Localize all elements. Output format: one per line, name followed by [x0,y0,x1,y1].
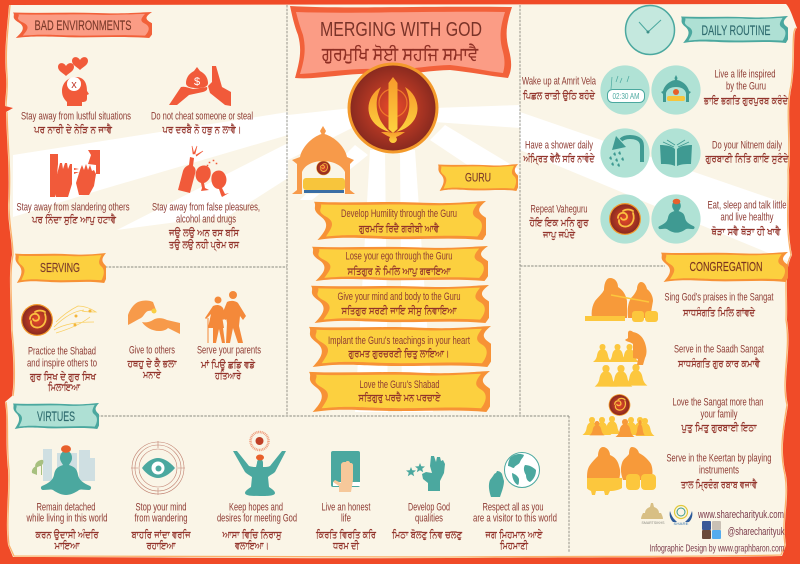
text: detached: while living in this world [26,512,108,524]
text: praises [664,292,774,319]
text: shabad: ਗੁਰ ਸਿਖ ਦੇ ਗੁਰ ਸਿਖ [29,371,97,383]
banner: mind and body [311,285,492,323]
text: detached [26,502,108,552]
banner: humility [314,201,489,240]
icon: smart sikhs logo [641,503,665,525]
decorative rays [13,105,790,412]
heading: guru [438,164,520,191]
text: give [127,344,177,381]
text: wandering [131,502,191,552]
heading: congregation [661,252,790,282]
text: hopes [217,502,297,552]
text: do not cheat: ਪਰ ਦਰਬੈ ਨੋ ਹਥੁ ਨ ਲਾਵੈ। [162,123,242,136]
title text: MERGING WITH GOD [320,19,482,41]
text: amrit vela: Wake up at Amrit Vela [522,76,597,88]
text: lustful situations: ਪਰ ਨਾਰੀ ਦੇ ਨੇੜਿ ਨ ਜਾਵੈ [33,124,113,136]
text: amrit vela: ਪਿਛਲ ਰਾਤੀ ਉਠਿ ਬਹੰਦੇ [522,90,595,102]
text: honest: ਕਿਰਤਿ ਵਿਰਤਿ ਕਰਿ [315,529,377,541]
icon: hand and globe [489,452,540,497]
text: shower [523,140,595,165]
text: respect [473,502,557,552]
text: lustful situations [21,110,131,136]
text: false pleasures [152,202,260,251]
banner: humility: Develop Humility through the Guru [341,208,457,220]
heading: virtues: VIRTUES [37,409,75,424]
text: slandering: ਪਰ ਨਿੰਦਾ ਸੁਣਿ ਆਪੁ ਹਟਾਵੈ [31,214,117,226]
icon: giving hands [128,300,180,334]
text: give: ਹਥਹੁ ਦੇ ਕੈ ਭਲਾ [127,358,177,370]
text: god qualities: Develop God [408,502,450,514]
text: life inspired [703,68,788,107]
banner: shabad [309,371,494,412]
icon: social media squares [702,521,721,539]
heading: bad environments: BAD ENVIRONMENTS [34,18,132,33]
text: hopes: desires for meeting God [217,512,297,524]
text: saadh sangat [674,344,764,370]
banner: ego [312,246,491,281]
icon: eye target [131,441,185,495]
text: honest: life [341,512,351,524]
text: honest [315,502,377,552]
text: lustful situations: Stay away from lustful situations [21,110,131,122]
text: respect: ਮਿਹਮਾਣੀ [499,540,529,552]
icon: hands blocking ears [50,150,100,197]
text: god qualities: ਮਿਠਾ ਬੋਲਣੁ ਨਿਵ ਚਲਣੁ [391,528,462,541]
title banner: ਗੁਰਮੁਖਿ ਸੋਈ ਸਹਜਿ ਸਮਾਵੈ [321,44,479,64]
text: respect: ਜਗ ਮਿਹਮਾਨ ਆਏ [485,529,543,541]
icon: share logo [670,506,692,526]
icon: smart sikhs logo: SMARTSIKHS [642,521,665,525]
text: amrit vela [522,76,597,102]
text: shabad: Practice the Shabad [28,346,96,358]
icon: hand on book [331,451,360,492]
icon: elderly parents [205,291,246,343]
text: give: ਮਨਾਏ [142,369,161,381]
heading: serving: SERVING [40,261,80,275]
heading: virtues [13,403,101,429]
text: do not cheat: Do not cheat someone or steal [151,110,253,122]
text: vaheguru [529,204,589,241]
text: praises: ਸਾਧਸੰਗਤਿ ਮਿਲਿ ਗਾਂਵਦੇ [682,307,755,319]
text: hopes: Keep hopes and [229,502,283,514]
dashed section dividers [97,5,665,552]
text: wandering: ਬਾਹਰਿ ਜਾਂਦਾ ਵਰਜਿ [131,529,191,541]
text: god qualities: qualities [415,512,443,524]
text: parents: ਹਤਿਆਰੇ [214,370,242,382]
icon: meditating in city [32,445,95,495]
icon: figure with raised arms and sun [233,432,286,496]
text: keertan: ਤਾਲ ਮ੍ਰਿਦੰਗ ਰਬਾਬ ਵਜਾਵੈ [680,479,758,491]
text: honest: ਧਰਮ ਦੀ [332,540,360,552]
text: shower: ਅੰਮ੍ਰਿਤ ਵੇਲੈ ਸਰਿ ਨਾਵੰਦੇ [523,153,595,165]
text: eat sleep [708,200,786,238]
text: do not cheat [151,110,253,136]
text: vaheguru: Repeat Vaheguru [530,204,588,216]
title banner [290,6,512,78]
panel: daily routine [522,65,789,244]
heading: serving [15,253,108,283]
text: respect: Respect all as you [482,502,544,514]
text: saadh sangat: ਸਾਧਸੰਗਤਿ ਗੁਰ ਕਾਰ ਕਮਾਵੈ [677,358,761,370]
text: keertan: instruments [699,464,739,476]
icon: musicians singing [585,278,658,322]
panel: bad environments [16,57,260,251]
text: god qualities [391,502,462,541]
text: detached: ਮਾਇਆ [54,540,80,552]
text: shabad: ਮਿਲਾਇਆ [47,382,81,394]
icon: sangat with emblem [582,394,654,437]
text: vaheguru: ਹੋਇ ਇਕ ਮਨਿ ਗੁਰ [529,216,589,229]
icon: keertan musicians [587,447,656,495]
banner: shabad: Love the Guru's Shabad [360,379,440,391]
icon: serving the sangat [593,331,647,387]
text: nitnem [705,140,789,165]
text: slandering: Stay away from slandering others [16,202,130,214]
banner: mind and body: Give your mind and body to the Guru [338,291,460,303]
text: life inspired: Live a life inspired [714,68,776,80]
text: shower: Have a shower daily [525,140,593,152]
text: false pleasures: ਤਉ ਲਉ ਨਹੀ ਪ੍ਰੇਮ ਰਸ [168,239,239,251]
panel: serving [21,291,261,394]
text: eat sleep: ਥੋੜਾ ਸਵੈ ਥੋੜਾ ਹੀ ਖਾਵੈ [711,225,781,238]
icon: gurdwara [292,126,355,194]
text: vaheguru: ਜਾਪੁ ਜਪੰਦੇ [542,229,575,241]
heading: guru: GURU [465,170,491,184]
banner: ego: Lose your ego through the Guru [346,250,452,262]
text: life inspired: by the Guru [726,80,766,92]
text: detached: Remain detached [36,502,96,514]
text: wandering: Stop your mind [136,502,186,514]
text: love sangat: ਪੁਤੁ ਮਿਤੁ ਗੁਰਬਾਈ ਇਠਾ [681,422,757,434]
icon: hands and money bag [169,66,231,106]
panel: guru banners [309,201,495,412]
panel: congregation [582,278,774,495]
banner: mind and body: ਸਤਿਗੁਰ ਸਰਣੀ ਜਾਇ ਸੀਸੁ ਨਿਵਾਇਆ [341,305,457,317]
text: love sangat: your family [700,408,738,420]
text: keertan [666,452,772,491]
heading: daily routine [681,16,790,43]
icon: champagne and glasses [178,146,229,197]
text: slandering [16,202,130,226]
icon: wall clock [626,6,674,54]
banner: teachings: ਗੁਰਮਤ ਗੁਰਚਰਣੀ ਚਿਤੁ ਲਾਇਆ। [348,348,450,360]
icon: stars and hand [406,456,445,491]
icon: ek onkar in circle [600,194,650,244]
text: hopes: ਆਸਾ ਵਿਚਿ ਨਿਰਾਸੁ [222,529,282,541]
icon: head with hearts: x [71,79,77,91]
icon: shower [600,128,650,178]
text: eat sleep: and live healthy [720,212,774,224]
text: false pleasures: alcohol and drugs [176,214,236,226]
text: respect: are a visitor to this world [473,512,557,524]
text: shabad [27,346,97,394]
banner: humility: ਗੁਰਮਤਿ ਰਿਦੈ ਗਰੀਬੀ ਆਵੈ [358,223,440,235]
text: wandering: ਰਹਾਇਆ [146,540,176,552]
icon: alarm clock: 02:30 AM [612,92,640,101]
banner: teachings: Implant the Guru's teachings in your heart [328,335,470,347]
text: parents: ਮਾਂ ਪਿਉ ਛਡਿ ਵਡੇ [200,359,255,371]
icon: share logo: SHARE [674,521,689,526]
text: honest: Live an honest [322,502,370,514]
text: shabad: and inspire others to [27,358,97,370]
heading: congregation: CONGREGATION [690,260,762,274]
text: detached: ਕਰਨ ਉਦਾਸੀ ਅੰਦਰਿ [35,529,99,541]
text: parents [197,344,261,382]
banner: ego: ਸਤਿਗੁਰ ਨੋ ਮਿਲਿ ਆਪੁ ਗਵਾਇਆ [347,264,451,278]
icon: head with hearts [58,57,89,106]
panel: virtues [26,432,557,552]
text: love sangat [672,396,764,434]
text: hopes: ਵਲਾਇਆ। [234,540,269,552]
text: parents: Serve your parents [197,344,261,356]
text: give: Give to others [129,344,175,356]
icon: khanda emblem [348,62,438,154]
icon: emblem with music [21,304,96,336]
banner: teachings [309,326,495,367]
banner: shabad: ਸਤਿਗੁਰੁ ਪਰਚੈ ਮਨ ਪਰਚਾਏ [358,392,441,404]
icon: teal gurdwara [651,65,701,115]
text: wandering: from wandering [134,512,188,524]
icon: open book [651,128,701,178]
text: false pleasures: Stay away from false pleasures, [152,202,260,214]
text: false pleasures: ਜਉ ਲਉ ਅਨ ਰਸ ਬਸਿ [168,227,239,239]
footer credits [641,503,785,554]
icon: alarm clock [600,65,650,115]
icon: hands and money bag: $ [194,76,200,88]
icon: meditating figure [651,194,701,244]
heading: bad environments [13,12,155,38]
